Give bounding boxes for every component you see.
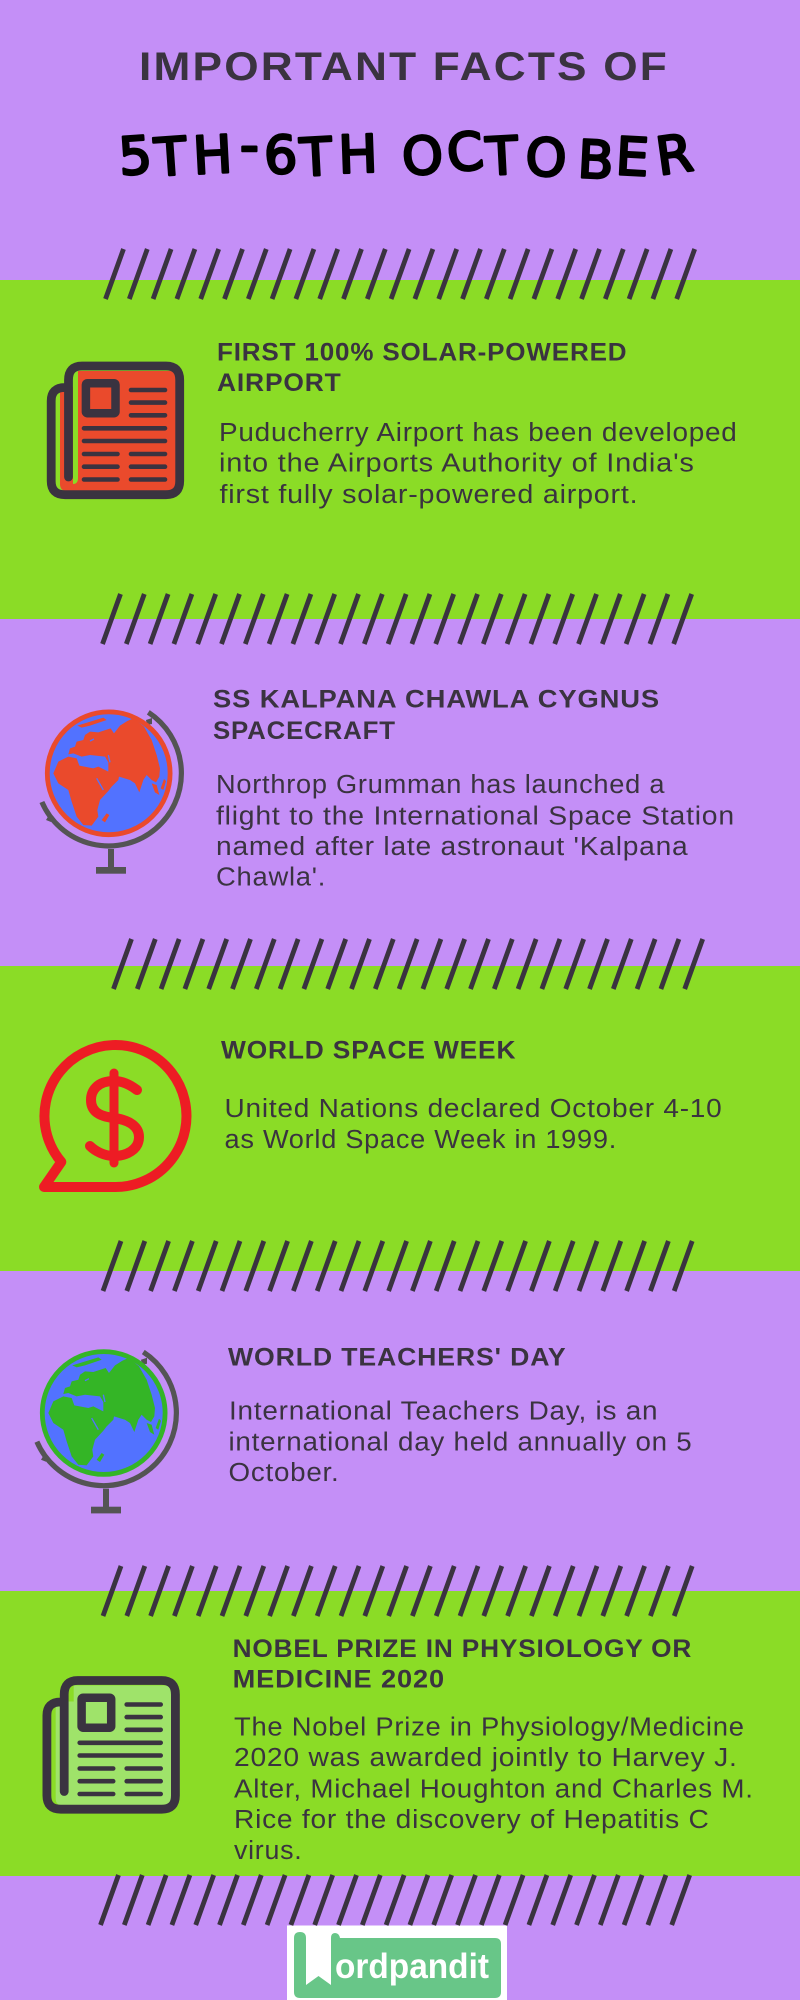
- body text: Chawla'.: [216, 864, 326, 892]
- panel: World Teachers' Day: [0, 1271, 800, 1591]
- subtitle: 5TH-6TH OCTOBER: [117, 116, 697, 192]
- panel: Kalpana Chawla spacecraft: [0, 619, 800, 966]
- body text: [216, 771, 735, 892]
- heading: [213, 686, 660, 745]
- body text: flight to the International Space Station: [216, 802, 735, 830]
- heading: MEDICINE 2020: [233, 1666, 445, 1694]
- heading: FIRST 100% SOLAR-POWERED: [217, 338, 627, 366]
- body text: virus.: [234, 1837, 302, 1865]
- body text: [224, 1095, 722, 1154]
- heading: AIRPORT: [217, 369, 342, 397]
- panel: World Space Week: [0, 966, 800, 1271]
- icon: orange newspaper: [51, 366, 180, 495]
- body text: Northrop Grumman has launched a: [216, 771, 665, 799]
- body text: [234, 1714, 754, 1865]
- footer panel: [0, 1876, 800, 2000]
- body text: [228, 1398, 692, 1487]
- logo: Wordpandit: [287, 1926, 507, 2000]
- body text: Puducherry Airport has been developed: [219, 419, 738, 447]
- heading: SS KALPANA CHAWLA CYGNUS: [213, 686, 660, 714]
- body text: [219, 419, 738, 509]
- body text: October.: [228, 1459, 340, 1487]
- panel: solar airport: [0, 280, 800, 619]
- icon: red dollar speech bubble: [44, 1045, 186, 1187]
- heading: WORLD SPACE WEEK: [221, 1036, 516, 1064]
- heading: NOBEL PRIZE IN PHYSIOLOGY OR: [233, 1635, 692, 1663]
- body text: named after late astronaut 'Kalpana: [216, 833, 689, 861]
- heading: WORLD TEACHERS' DAY: [228, 1343, 566, 1371]
- body text: 2020 was awarded jointly to Harvey J.: [234, 1744, 738, 1772]
- body text: Alter, Michael Houghton and Charles M.: [234, 1776, 754, 1804]
- header panel: [0, 0, 800, 280]
- icon: green newspaper: [47, 1680, 175, 1809]
- body text: International Teachers Day, is an: [229, 1398, 658, 1426]
- heading: SPACECRAFT: [213, 717, 396, 745]
- body text: Rice for the discovery of Hepatitis C: [234, 1806, 710, 1834]
- icon: orange globe: [42, 712, 181, 874]
- panel: Nobel Prize: [0, 1591, 800, 1876]
- heading: [217, 338, 627, 397]
- body text: as World Space Week in 1999.: [224, 1126, 617, 1154]
- body text: The Nobel Prize in Physiology/Medicine: [234, 1714, 745, 1742]
- heading: [233, 1635, 692, 1694]
- icon: green globe: [37, 1352, 176, 1513]
- body text: United Nations declared October 4-10: [224, 1095, 722, 1123]
- logo: Wordpandit: ordpandit: [335, 1947, 489, 1986]
- body text: into the Airports Authority of India's: [219, 450, 695, 478]
- body text: first fully solar-powered airport.: [220, 481, 638, 509]
- body text: international day held annually on 5: [228, 1429, 692, 1457]
- title: IMPORTANT FACTS OF: [139, 45, 669, 89]
